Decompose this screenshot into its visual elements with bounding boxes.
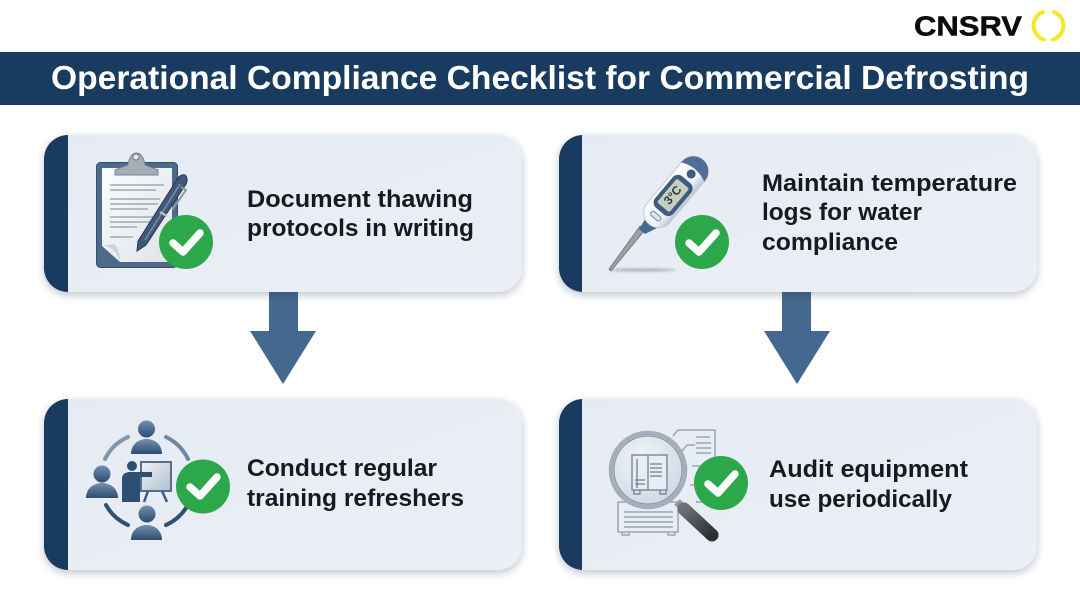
text: conduct regular: training refreshers <box>247 485 464 512</box>
icon: thermometer <box>608 150 714 272</box>
text: audit equipment: Audit equipment <box>769 456 968 483</box>
icon: green check <box>675 215 729 269</box>
text: maintain temperature: compliance <box>762 229 898 256</box>
title banner <box>0 52 1080 105</box>
arrow: left column <box>250 292 316 384</box>
logo: CNSRV <box>914 10 1063 42</box>
text: maintain temperature: Maintain temperature <box>762 170 1017 197</box>
text: document thawing: protocols in writing <box>247 215 474 242</box>
text: maintain temperature: logs for water <box>762 199 922 226</box>
text: audit equipment: use periodically <box>769 486 953 513</box>
icon: green check <box>176 460 230 514</box>
icon: magnifier over equipment <box>611 430 715 535</box>
icon: yellow ring <box>1034 12 1063 40</box>
icon: green check <box>159 215 213 269</box>
arrow: right column <box>764 292 830 384</box>
panel: audit equipment <box>559 399 1037 570</box>
text: conduct regular: Conduct regular <box>247 455 437 482</box>
icon: thermometer: 3°C <box>661 183 685 207</box>
icon: green check <box>694 456 748 510</box>
title banner: Operational Compliance Checklist for Commercial Defrosting <box>51 59 1029 96</box>
text: document thawing: Document thawing <box>247 186 473 213</box>
icon: clipboard and pen <box>96 153 187 268</box>
logo: CNSRV: CNSRV <box>914 10 1022 42</box>
panel: training refreshers <box>44 399 522 570</box>
panel: document thawing protocols <box>44 135 522 292</box>
panel: temperature logs <box>559 135 1037 292</box>
icon: training group <box>86 420 188 540</box>
